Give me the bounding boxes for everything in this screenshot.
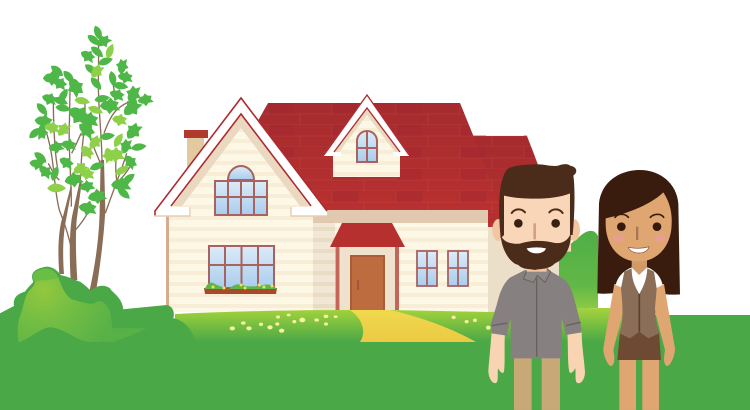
man: left arm <box>488 332 505 383</box>
woman: nose <box>636 227 638 240</box>
porch <box>330 223 405 310</box>
chimney <box>184 130 208 178</box>
ground <box>0 342 750 410</box>
man: right arm <box>567 332 585 383</box>
woman: blouse <box>616 267 663 310</box>
woman: skirt <box>617 332 661 360</box>
shaded wall strip <box>313 223 335 312</box>
man: face <box>502 188 571 252</box>
lower gable window <box>209 246 274 288</box>
man: collar <box>523 268 551 282</box>
woman: left arm <box>603 284 624 366</box>
woman: face <box>606 192 672 262</box>
man: ears <box>492 219 504 241</box>
gable trim <box>154 98 327 216</box>
woman: cheeks <box>613 234 666 242</box>
house <box>154 95 560 312</box>
man: shirt <box>491 270 582 358</box>
porch posts <box>336 247 340 310</box>
woman: eyebrows <box>615 214 664 217</box>
garden path <box>350 310 476 342</box>
dark leaves <box>27 24 154 218</box>
bush shadow mound <box>20 327 87 342</box>
dormer <box>324 95 409 177</box>
front gable wall <box>167 114 313 312</box>
annex wall <box>487 227 559 312</box>
light leaves <box>43 43 130 192</box>
tree <box>27 24 154 292</box>
front door <box>350 255 385 310</box>
eave band <box>313 210 488 223</box>
man: neck <box>527 262 547 272</box>
middle wall <box>313 223 488 312</box>
flower box <box>204 283 277 294</box>
bush light layer <box>18 269 147 342</box>
lawn flowers <box>230 314 491 333</box>
woman: vest <box>619 268 659 338</box>
woman: right arm <box>654 284 675 366</box>
man: smile <box>527 247 546 253</box>
branches <box>47 40 133 250</box>
lawn <box>175 308 650 342</box>
man: beard <box>501 233 571 270</box>
woman: vest seam <box>637 294 642 332</box>
woman <box>597 170 680 410</box>
woman: hair back <box>597 170 680 295</box>
man: eyebrows <box>512 209 563 213</box>
woman: neck <box>632 258 647 275</box>
trunks <box>58 160 105 292</box>
roof: rear wing <box>470 136 560 240</box>
man: legs <box>514 355 560 410</box>
upper gable window <box>215 166 267 215</box>
roof: main <box>250 103 501 210</box>
man: nose <box>533 223 536 239</box>
woman: legs <box>619 358 659 410</box>
ground: back right lawn <box>600 315 750 410</box>
man: eyes <box>514 219 560 228</box>
roof shingle lines <box>250 103 560 240</box>
woman: eyes <box>617 222 661 231</box>
porch roof <box>330 223 405 247</box>
dormer window <box>357 131 377 162</box>
wall edge <box>166 214 169 312</box>
man <box>488 164 585 410</box>
man: shirt details <box>492 278 581 357</box>
gable shadow <box>171 114 311 206</box>
bush dark layer <box>0 267 195 342</box>
woman: smile <box>628 247 649 253</box>
left bush <box>0 267 195 342</box>
man: hair <box>499 164 576 238</box>
bush top blob <box>33 269 59 282</box>
right windows <box>417 251 468 286</box>
right background bush <box>555 231 598 310</box>
